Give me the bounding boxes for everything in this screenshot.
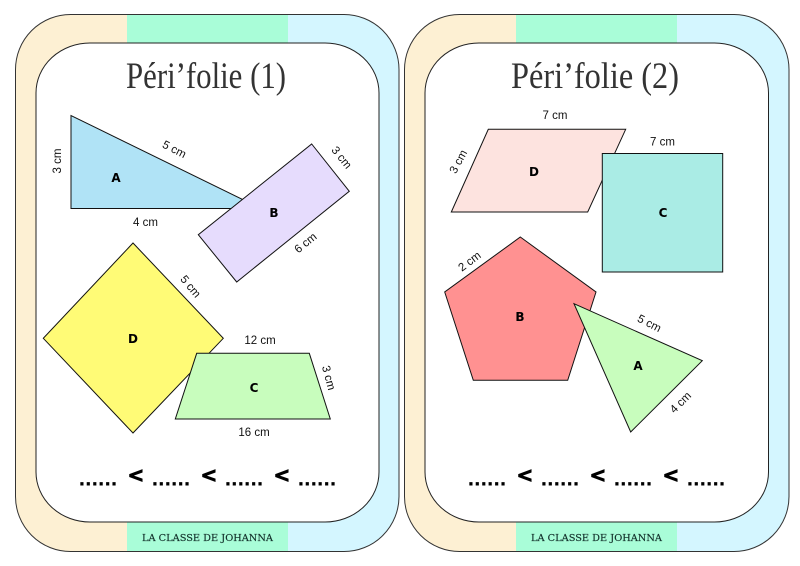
- answer line card 2: ......: [468, 470, 506, 490]
- shape A: green triangle: 4 cm: [668, 390, 694, 416]
- answer line card 1: [78, 463, 336, 490]
- panel: card 1: [15, 14, 400, 552]
- answer line card 1: <: [200, 463, 217, 487]
- footer credit card 2: LA CLASSE DE JOHANNA: [531, 534, 663, 544]
- shape A: blue right triangle: 5 cm: [160, 139, 188, 161]
- card 2 frame with coloured bands: [404, 14, 790, 552]
- shape D: yellow square: [43, 243, 223, 433]
- shape C: green trapezoid: 3 cm: [319, 364, 337, 392]
- footer credit card 1: LA CLASSE DE JOHANNA: [142, 534, 274, 544]
- shape C: green trapezoid: [175, 335, 337, 439]
- answer line card 2: <: [662, 463, 679, 487]
- shape A: blue right triangle: 4 cm: [133, 217, 158, 229]
- shape C: teal square: C: [659, 206, 668, 220]
- shape D: pink parallelogram: 7 cm: [543, 110, 567, 122]
- shape D: pink parallelogram: [448, 110, 626, 212]
- shape A: blue right triangle: [52, 116, 261, 229]
- shape B: lilac rectangle: 6 cm: [293, 231, 319, 256]
- shape B: red pentagon: [445, 237, 596, 380]
- answer line card 1: ......: [78, 470, 118, 490]
- answer line card 1: <: [274, 463, 290, 487]
- shape B: red pentagon: B: [515, 310, 525, 324]
- shape D: yellow square: 5 cm: [177, 274, 203, 300]
- answer line card 1: ......: [152, 470, 190, 490]
- answer line card 2: ......: [540, 470, 580, 490]
- shape B: lilac rectangle: B: [269, 206, 279, 220]
- shape A: green triangle: 5 cm: [635, 313, 663, 335]
- answer line card 2: ......: [686, 470, 726, 490]
- shape B: red pentagon: 2 cm: [456, 250, 484, 274]
- card 1 frame with coloured bands: [15, 14, 400, 552]
- shape A: blue right triangle: A: [111, 171, 121, 185]
- shape A: green triangle: A: [633, 359, 643, 373]
- shape D: yellow square: D: [128, 332, 138, 346]
- shape B: lilac rectangle: [198, 144, 354, 282]
- answer line card 2: [468, 463, 726, 490]
- shape C: teal square: [602, 136, 723, 272]
- title card 1: Péri’folie (1): [126, 56, 286, 97]
- answer line card 2: <: [590, 463, 606, 487]
- answer line card 1: ......: [298, 470, 336, 490]
- shape C: green trapezoid: C: [250, 381, 259, 395]
- answer line card 1: <: [128, 463, 144, 487]
- shape A: blue right triangle: 3 cm: [52, 149, 64, 173]
- shape A: green triangle: [574, 304, 702, 432]
- shape D: pink parallelogram: 3 cm: [448, 148, 470, 176]
- shape D: pink parallelogram: D: [529, 165, 539, 179]
- shape C: green trapezoid: 12 cm: [244, 335, 276, 347]
- shape B: lilac rectangle: 3 cm: [328, 145, 354, 171]
- title card 2: Péri’folie (2): [511, 56, 679, 97]
- shape C: green trapezoid: 16 cm: [238, 427, 270, 439]
- answer line card 1: ......: [224, 470, 264, 490]
- answer line card 2: ......: [614, 470, 652, 490]
- answer line card 2: <: [516, 463, 533, 487]
- shape C: teal square: 7 cm: [650, 136, 675, 148]
- panel: card 2: [404, 14, 790, 552]
